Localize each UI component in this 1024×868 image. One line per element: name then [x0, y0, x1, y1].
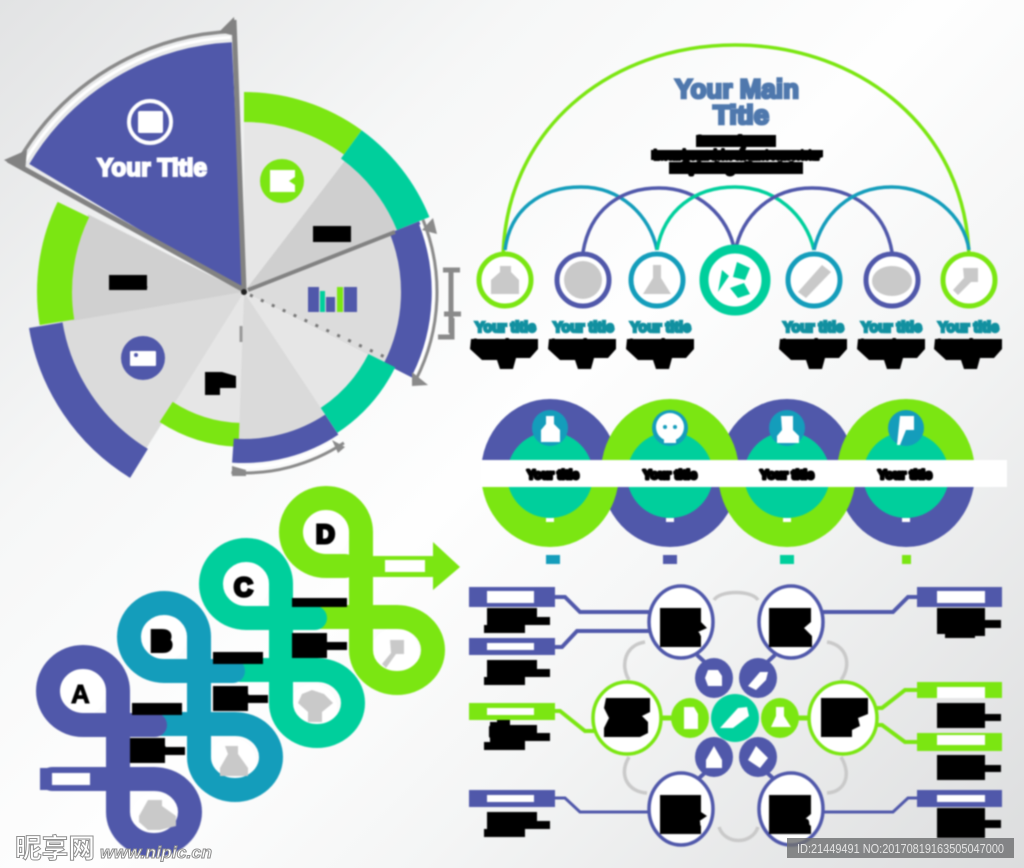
watermark: site logo: www.nipic.cn — [100, 843, 212, 862]
knot C — [211, 550, 353, 736]
slice label: bottom: pH5 — [208, 375, 232, 389]
band labels: Your title — [760, 467, 814, 482]
panel: arcs and title — [470, 45, 1002, 369]
watermark: site logo: 昵享网 — [15, 834, 95, 864]
tag text blocks: Lorem ip — [940, 610, 982, 624]
heading: main title — [675, 74, 799, 130]
panel: four overlapping circles — [481, 399, 1007, 564]
knot text blocks: Lorem — [295, 637, 325, 651]
panel: flower diagram — [469, 586, 1002, 845]
knot A — [40, 657, 190, 845]
ring text blocks: ipsum — [772, 629, 808, 643]
ring text blocks: Lorem — [610, 699, 646, 713]
title description: adipiscing elit sed do — [671, 161, 801, 175]
band labels: Your title — [527, 467, 579, 482]
arrow — [340, 542, 460, 590]
knot text blocks: Lorem — [216, 690, 248, 704]
ring text blocks — [604, 608, 868, 834]
node descriptions: Lorem ipsum — [630, 338, 690, 352]
knot text blocks — [130, 598, 347, 763]
node 2 — [557, 254, 609, 306]
tag text blocks — [484, 608, 1001, 838]
tag text blocks: Lorem ip — [940, 705, 982, 719]
node circles — [479, 249, 995, 311]
icon: key — [382, 640, 404, 668]
node centre — [704, 249, 766, 311]
outer ring segments — [0, 16, 520, 568]
right tags — [917, 587, 1002, 807]
slice label: bottom — [205, 372, 236, 395]
panel: knot steps — [40, 498, 460, 845]
large rings — [593, 586, 877, 845]
node labels — [475, 319, 999, 336]
node labels: Your title — [783, 319, 844, 336]
label B: B — [152, 626, 171, 656]
node 7 — [943, 254, 995, 306]
icon: star — [298, 690, 333, 722]
node labels: Your title — [861, 319, 922, 336]
white band — [481, 460, 1007, 487]
band labels — [527, 467, 932, 482]
icon: bottle — [532, 410, 568, 446]
icon: pot — [220, 746, 248, 776]
icon: skull — [652, 410, 688, 446]
teal inner discs — [507, 432, 949, 518]
icon: bar chart — [308, 287, 357, 312]
slice label: top: MAX — [316, 228, 348, 242]
knot text blocks: Lorem — [133, 742, 165, 756]
icon: stamp — [769, 410, 805, 446]
icon: green badge — [260, 159, 304, 203]
markers — [546, 518, 911, 564]
watermark: image id — [787, 838, 1014, 858]
slice label: left — [109, 275, 147, 290]
node descriptions: Lorem ipsum — [783, 338, 843, 352]
slice label: left: MAX — [111, 276, 145, 290]
node 6 — [866, 254, 918, 306]
ring text blocks: ipsum — [825, 719, 849, 733]
node labels: Your title — [475, 319, 536, 336]
label D: D — [316, 519, 335, 549]
node labels: Your title — [553, 319, 614, 336]
node 3 — [631, 254, 683, 306]
green halves — [481, 399, 975, 547]
heading: your title: Your Title — [97, 154, 207, 182]
knot D — [291, 498, 433, 683]
pie slices — [116, 164, 372, 420]
ring text blocks: Lorem — [825, 699, 861, 713]
label A: A — [71, 679, 90, 709]
ring text blocks: Lorem — [772, 796, 808, 810]
small arches — [505, 187, 969, 252]
band labels: Your title — [643, 467, 697, 482]
ring text blocks: Lorem — [663, 609, 699, 623]
tag text blocks: Lorem ip — [940, 757, 982, 771]
node descriptions: Lorem ipsum — [552, 338, 612, 352]
slice label: top — [313, 226, 351, 242]
title description: Lorem ipsum — [698, 134, 774, 148]
node descriptions — [470, 338, 1002, 369]
ring text blocks: ipsum — [772, 816, 808, 830]
ring text blocks: Lorem — [663, 796, 699, 810]
big arch — [503, 45, 969, 262]
connector lines — [553, 597, 920, 812]
band labels: Your title — [878, 467, 932, 482]
icon: title badge — [129, 101, 171, 143]
tag text blocks: Lorem ip — [490, 813, 534, 827]
node descriptions: Lorem ipsum — [861, 338, 921, 352]
highlighted sector: your title — [0, 0, 602, 650]
icons in small rings — [684, 670, 791, 768]
node descriptions: Lorem ipsum — [474, 338, 534, 352]
knot B — [129, 603, 271, 790]
ring text blocks: ipsum — [663, 816, 699, 830]
heading: main title: Your Main — [675, 74, 799, 104]
node labels: Your title — [630, 319, 691, 336]
grey petals — [624, 592, 847, 840]
title description — [651, 134, 823, 175]
tag text blocks: Lorem ip — [490, 661, 534, 675]
icon: key — [888, 410, 924, 446]
guide lines — [0, 41, 495, 543]
ring text blocks: ipsum — [663, 629, 699, 643]
title description: Lorem ipsum dolor sit amet consectetur — [654, 148, 820, 162]
ring text blocks: ipsum — [610, 719, 640, 733]
node labels: Your title — [938, 319, 999, 336]
tag text blocks: Lorem ip — [490, 725, 534, 739]
panel: pie chart — [0, 0, 602, 650]
icon: blue badge — [121, 336, 165, 380]
small rings — [671, 658, 799, 777]
centre hub — [711, 694, 759, 742]
ring text blocks: Lorem — [772, 609, 808, 623]
watermark: site logo — [15, 834, 212, 864]
heading: main title: Title — [713, 100, 769, 130]
node 1 — [479, 254, 531, 306]
node 5 — [788, 254, 840, 306]
blue halves — [481, 399, 975, 547]
label C: C — [234, 572, 253, 602]
icon: jar — [139, 800, 176, 830]
node descriptions: Lorem ipsum — [938, 338, 998, 352]
tag text blocks: Lorem ip — [940, 812, 982, 826]
tag text blocks: Lorem ip — [490, 609, 534, 623]
left tags — [469, 587, 555, 807]
